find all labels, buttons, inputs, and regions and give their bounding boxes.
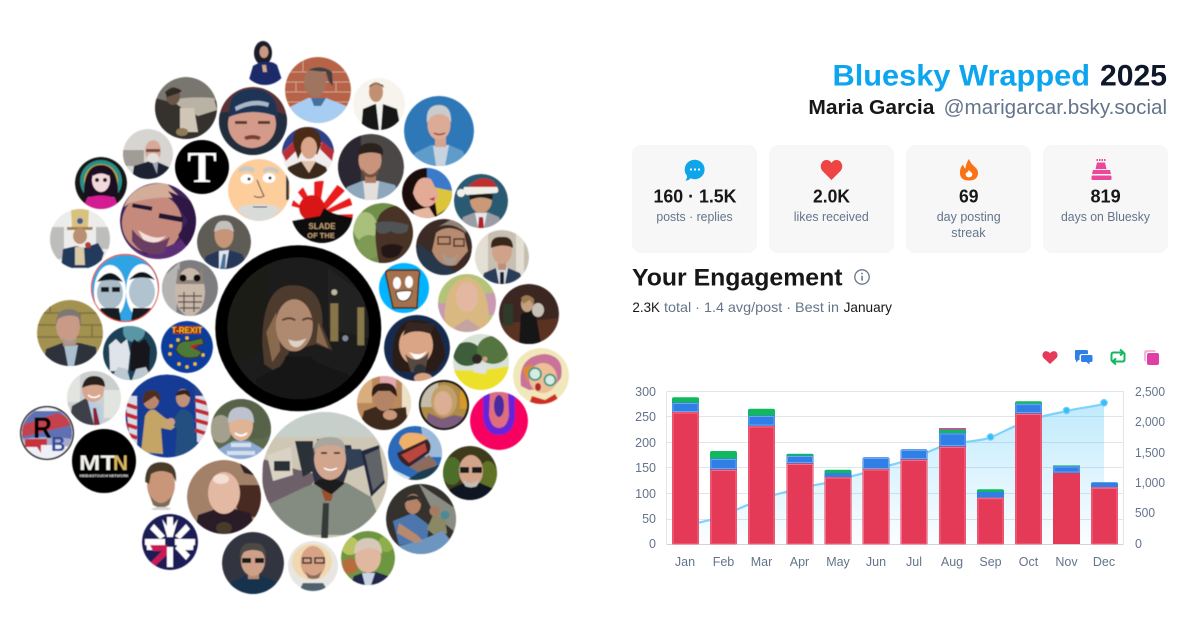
right axis labels: 0 <box>1135 537 1142 551</box>
avatar: cartoon woman with glasses <box>513 348 569 404</box>
stat label: days: days on Bluesky <box>1061 210 1151 224</box>
avatar: anime girl <box>75 157 127 209</box>
avatar: cartoon bald man <box>228 159 290 221</box>
icon: speech bubble <box>685 160 705 181</box>
month labels: Aug <box>941 555 963 569</box>
avatar: man in suit, outdoors <box>67 371 121 425</box>
stat value: likes: 2.0K <box>813 186 850 206</box>
avatar: bald sketch man <box>288 541 338 591</box>
icon: flame <box>960 159 978 180</box>
avatar: head cutout man <box>144 461 177 510</box>
stat label: streak: streak <box>951 226 986 240</box>
avatar: woman with black ring <box>419 380 469 430</box>
icon: replies bubbles <box>1075 350 1092 364</box>
stat card: likes received <box>769 145 894 253</box>
avatar: Uncle Sam <box>50 209 110 269</box>
avatar: George Takei style <box>210 399 271 459</box>
right axis labels: 500 <box>1135 506 1155 520</box>
icon: birthday cake <box>1092 159 1112 180</box>
bar: Oct <box>1015 401 1042 544</box>
avatar: older man in suit <box>123 129 173 179</box>
icon: quote squares <box>1144 350 1159 365</box>
month labels: Sep <box>979 555 1002 569</box>
right axis labels: 1,000 <box>1135 476 1165 490</box>
avatar: T-Rexit badge <box>161 321 213 373</box>
avatar: woman with Ukraine flag <box>402 168 452 219</box>
bar: Jul <box>900 449 928 544</box>
stat value: streak: 69 <box>959 186 978 206</box>
avatar: man among green leaves <box>341 531 395 585</box>
avatar: man on blue background <box>404 96 474 166</box>
cumulative line <box>686 404 1104 526</box>
avatar: bald man <box>187 460 261 534</box>
avatar: curly-haired man laughing <box>357 376 411 430</box>
bar: Dec <box>1091 482 1118 544</box>
month labels: May <box>826 555 851 569</box>
stacked bars <box>672 397 1118 544</box>
month labels: Feb <box>713 555 734 569</box>
icon: likes heart <box>1042 351 1058 364</box>
avatar: NYT T logo: T <box>187 143 217 192</box>
engagement summary line: total · 1.4 avg/post · Best in <box>664 299 839 315</box>
month labels: Oct <box>1019 555 1039 569</box>
avatar: MTN logo: N <box>113 452 128 475</box>
avatar: cat with glasses <box>162 260 218 316</box>
user name and handle <box>808 97 1167 119</box>
icon: info <box>855 270 869 284</box>
right axis labels <box>1135 385 1165 551</box>
left axis labels: 150 <box>635 461 656 475</box>
left axis labels: 0 <box>649 537 656 551</box>
avatar: man in suit, columns <box>475 230 529 284</box>
stat card: day posting streak <box>906 145 1031 253</box>
month labels: Mar <box>751 555 772 569</box>
engagement chart <box>635 385 1165 569</box>
month labels <box>675 555 1115 569</box>
avatar: Slade rising sun <box>291 181 353 243</box>
avatar: MTN logo: MT <box>79 452 116 475</box>
avatar: person in yellow field <box>453 334 509 390</box>
icon: repost arrows <box>1112 350 1124 364</box>
stat label: streak: day posting <box>937 210 1001 224</box>
avatar: T-Rexit badge: T-REXIT <box>172 326 202 335</box>
bar: Nov <box>1053 465 1080 544</box>
avatar: MTN logo: MEIDASTOUCH NETWORK <box>80 474 129 478</box>
avatar: man at yellow brick wall <box>37 300 103 366</box>
heading: your engagement: Your Engagement <box>632 264 843 292</box>
bar: Mar <box>748 409 775 544</box>
month labels: Nov <box>1055 555 1078 569</box>
avatar: man in black jacket <box>353 78 405 130</box>
month labels: Jun <box>866 555 886 569</box>
right axis labels: 2,500 <box>1135 385 1165 399</box>
month labels: Dec <box>1093 555 1115 569</box>
stat label: posts and replies: posts · replies <box>656 210 733 224</box>
user name and handle: @marigarcar.bsky.social <box>944 97 1167 119</box>
avatar: Slade rising sun: OF THE <box>307 231 335 240</box>
bar: Apr <box>786 454 814 544</box>
left axis labels: 300 <box>635 385 656 399</box>
avatar: older man with glasses <box>416 219 472 275</box>
avatar: skier with goggles <box>388 426 442 480</box>
engagement summary line: January <box>844 299 892 315</box>
left axis labels: 50 <box>642 512 656 526</box>
avatar: MTN logo <box>72 429 136 493</box>
header block <box>808 60 1167 119</box>
avatar: man grey background <box>197 215 251 269</box>
stat card: days on Bluesky <box>1043 145 1168 253</box>
avatar: pink abstract <box>470 392 528 450</box>
left axis labels: 250 <box>635 410 656 424</box>
month labels: Jul <box>906 555 922 569</box>
bar: Jun <box>862 457 890 544</box>
bar: May <box>824 470 852 544</box>
avatar: man in beanie <box>219 87 287 155</box>
avatar: man in sunglasses, leaves <box>353 203 413 263</box>
right axis labels: 2,000 <box>1135 415 1165 429</box>
avatar: man with long hair and mic <box>384 315 450 383</box>
avatar: woman with dog, dark room <box>499 284 559 344</box>
title: Bluesky Wrapped <box>832 60 1090 92</box>
avatar bubble cluster <box>20 41 569 594</box>
month labels: Jan <box>675 555 695 569</box>
avatar: RB logo <box>20 406 74 460</box>
engagement summary line <box>632 299 892 315</box>
stat label: likes: likes received <box>794 210 869 224</box>
left axis labels: 200 <box>635 436 656 450</box>
avatar: handshake with flags <box>125 374 209 458</box>
avatar: woman with flag <box>282 127 334 179</box>
cumulative line points <box>987 400 1107 440</box>
avatar: RB logo: B <box>51 434 65 456</box>
avatar: man in dark studio <box>338 134 404 200</box>
chart legend icons <box>1042 350 1159 365</box>
user name and handle: Maria Garcia <box>808 97 935 119</box>
avatar: helicopter crew <box>386 484 456 554</box>
avatar: UK arrows logo <box>142 514 198 570</box>
avatar: man with glasses, dark <box>222 532 284 594</box>
avatar: man in Santa hat <box>454 174 508 228</box>
stat card: posts and replies <box>632 145 757 253</box>
month labels: Apr <box>790 555 809 569</box>
engagement summary line: 2.3K <box>632 299 661 315</box>
stat label: streak <box>937 210 1001 240</box>
avatar: man at brick wall <box>285 57 351 123</box>
avatar: blonde woman <box>438 274 496 332</box>
avatar: man on couch <box>155 77 217 139</box>
bar: Feb <box>710 451 737 544</box>
avatar: Slade rising sun: SLADE <box>308 222 336 231</box>
avatar: NYT T logo <box>175 140 229 194</box>
avatar: white and black wolves <box>103 320 157 380</box>
left axis labels: 100 <box>635 487 656 501</box>
avatar: bald man in glasses, green <box>442 446 497 500</box>
avatar: smiling man purple <box>120 183 196 259</box>
bar: Sep <box>977 489 1004 544</box>
cumulative area under line <box>686 404 1104 544</box>
avatar: two men in sunglasses <box>91 254 159 322</box>
avatar: RB logo: R <box>33 412 52 445</box>
chart grid lines and frame <box>666 392 1124 544</box>
icon: heart <box>821 160 842 180</box>
bar: Aug <box>939 428 966 544</box>
title: 2025 <box>1100 60 1167 92</box>
stat value: days: 819 <box>1090 186 1121 206</box>
avatar: woman in blue jacket <box>248 41 282 85</box>
left axis labels <box>635 385 656 551</box>
avatar: man in train selfie <box>262 412 388 538</box>
right axis labels: 1,500 <box>1135 446 1165 460</box>
avatar: toast character <box>379 263 429 313</box>
avatar: central profile photo with black ring <box>215 245 381 411</box>
stat value: posts and replies: 160 · 1.5K <box>654 186 736 206</box>
bar: Jan <box>672 397 699 544</box>
